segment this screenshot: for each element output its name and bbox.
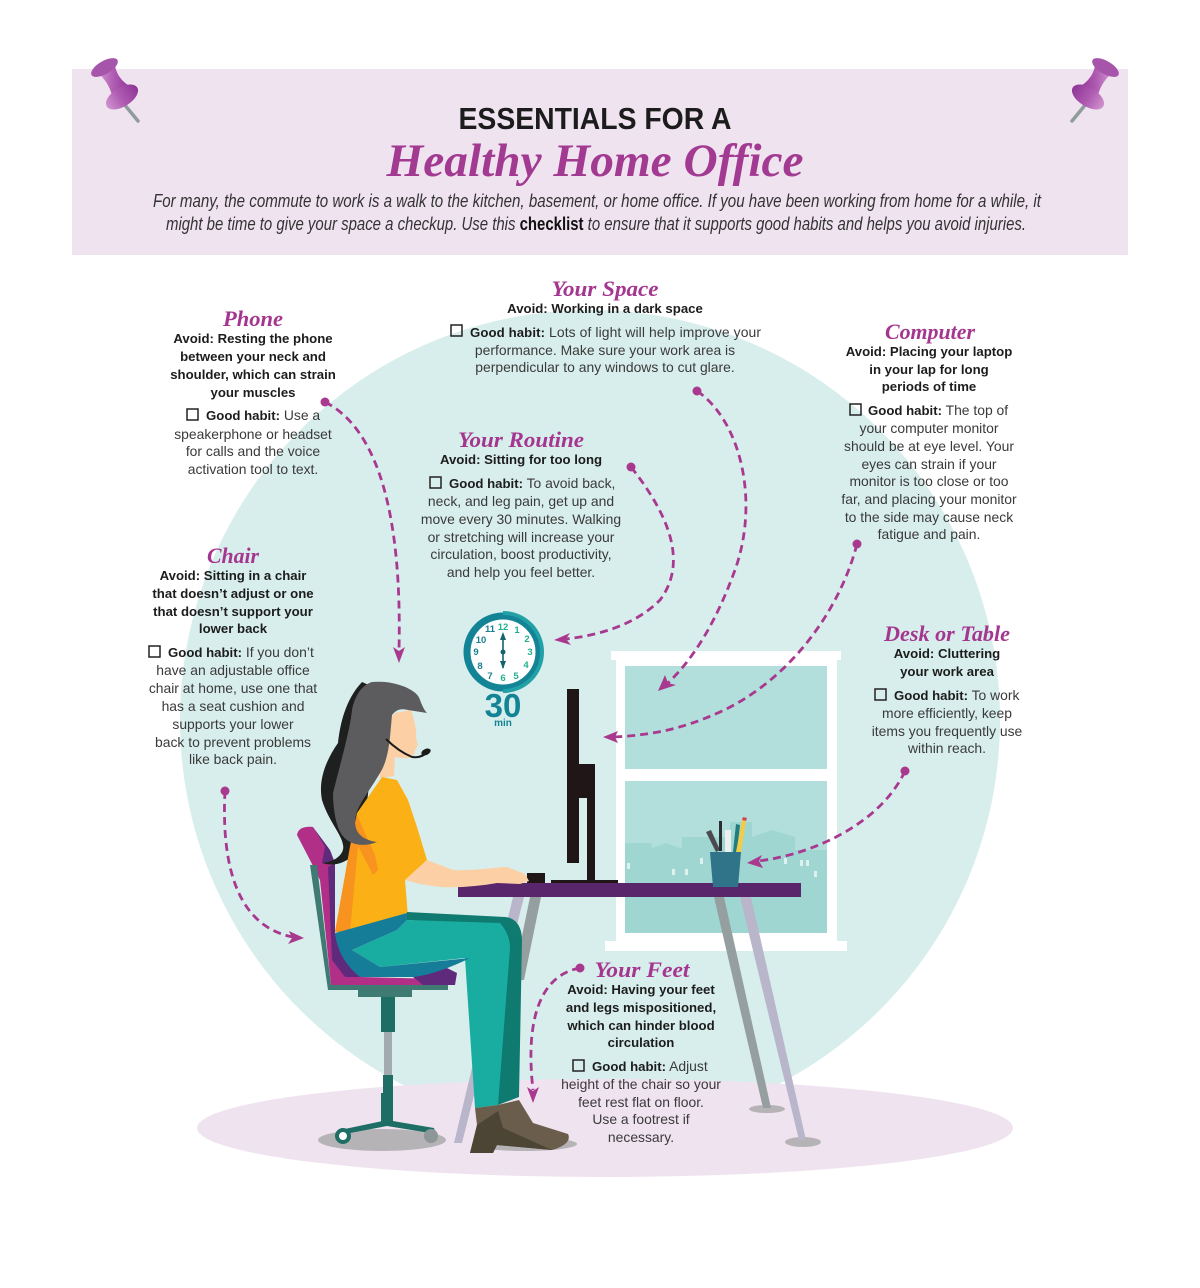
- avoid: your muscles: [210, 385, 296, 400]
- intro text: [153, 191, 1042, 234]
- panel: phone: [170, 306, 336, 477]
- avoid: periods of time: [882, 379, 976, 394]
- avoid: Avoid: Cluttering: [894, 646, 1000, 661]
- clock: 10: [476, 635, 486, 646]
- avoid: Avoid: Sitting in a chair: [160, 568, 306, 583]
- panel: desk or table: [872, 621, 1023, 756]
- avoid: lower back: [199, 621, 268, 636]
- avoid: shoulder, which can strain: [170, 367, 336, 382]
- good habit: or stretching will increase your: [428, 529, 615, 545]
- avoid: that doesn’t adjust or one: [152, 586, 314, 601]
- avoid: Avoid: Placing your laptop: [846, 344, 1012, 359]
- good habit: [451, 324, 761, 375]
- clock: min: [494, 718, 512, 729]
- boot: [470, 1100, 569, 1153]
- clock: 11: [485, 624, 496, 635]
- clock: 8: [477, 661, 483, 672]
- good habit: Good habit: To work: [894, 687, 1020, 703]
- good habit: monitor is too close or too: [849, 473, 1009, 489]
- good habit: within reach.: [907, 740, 986, 756]
- panel: computer: [841, 319, 1017, 542]
- person: [321, 682, 569, 1153]
- chair: [297, 827, 457, 1143]
- good habit: far, and placing your monitor: [841, 491, 1017, 507]
- good habit: [561, 1058, 721, 1145]
- avoid: in your lap for long: [869, 362, 989, 377]
- clock: 1: [514, 625, 520, 636]
- intro text: might be time to give your space a checkup. Use this checklist to ensure that it supports good habits and helps you avoid injuries.: [166, 214, 1026, 234]
- panel: your feet: [561, 957, 721, 1145]
- pants dark side: [407, 912, 522, 1105]
- good habit: speakerphone or headset: [174, 426, 332, 442]
- avoid: Avoid: Working in a dark space: [507, 301, 703, 316]
- good habit: like back pain.: [189, 751, 277, 767]
- good habit: neck, and leg pain, get up and: [428, 493, 614, 509]
- pants light: [352, 920, 510, 1108]
- good habit: supports your lower: [172, 716, 294, 732]
- arm: [405, 860, 529, 887]
- arrow: desk to cup: [747, 766, 910, 868]
- arrow: chair: [220, 786, 304, 944]
- heading: Desk or Table: [883, 621, 1010, 646]
- good habit: to the side may cause neck: [845, 509, 1013, 525]
- clock: 30: [485, 687, 521, 724]
- good habit: back to prevent problems: [155, 734, 311, 750]
- arrow: computer to monitor: [603, 540, 862, 743]
- icon: right push pin: [1068, 54, 1122, 121]
- window: [605, 651, 847, 951]
- good habit: Good habit: Adjust: [592, 1058, 708, 1074]
- avoid: and legs mispositioned,: [566, 1000, 716, 1015]
- arrow: routine to clock: [554, 462, 673, 645]
- good habit: feet rest flat on floor.: [578, 1094, 704, 1110]
- good habit: necessary.: [608, 1129, 674, 1145]
- avoid: Avoid: Having your feet: [567, 982, 715, 997]
- good habit: performance. Make sure your work area is: [475, 342, 735, 358]
- good habit: Good habit: To avoid back,: [449, 475, 615, 491]
- pants seat shadow: [335, 913, 470, 977]
- heading: Your Space: [552, 276, 659, 301]
- clock: 4: [523, 660, 529, 671]
- clock: 7: [487, 671, 493, 682]
- avoid: [170, 331, 336, 400]
- clock: 6: [500, 673, 506, 684]
- floor ellipse: [197, 1079, 1013, 1177]
- clock: [467, 613, 542, 729]
- panel: your space: [451, 276, 761, 375]
- header banner: [72, 54, 1128, 255]
- good habit: your computer monitor: [860, 420, 999, 436]
- avoid: circulation: [608, 1035, 674, 1050]
- good habit: [841, 402, 1017, 542]
- avoid: which can hinder blood: [566, 1018, 715, 1033]
- good habit: Use a footrest if: [592, 1111, 690, 1127]
- clock: 3: [527, 647, 533, 658]
- good habit: more efficiently, keep: [882, 705, 1012, 721]
- good habit: height of the chair so your: [561, 1076, 721, 1092]
- arrow: feet: [527, 964, 584, 1103]
- good habit: circulation, boost productivity,: [430, 546, 612, 562]
- heading: Computer: [885, 319, 975, 344]
- avoid: between your neck and: [180, 349, 326, 364]
- avoid: that doesn’t support your: [153, 604, 313, 619]
- background circle: [180, 310, 1000, 1130]
- good habit: items you frequently use: [872, 723, 1023, 739]
- good habit: move every 30 minutes. Walking: [421, 511, 621, 527]
- panel: your routine: [421, 427, 621, 580]
- headset: [386, 739, 428, 757]
- clock: 2: [524, 634, 530, 645]
- neck and face: [375, 710, 418, 778]
- good habit: should be at eye level. Your: [844, 438, 1014, 454]
- good habit: fatigue and pain.: [878, 526, 980, 542]
- long hair back: [321, 682, 380, 864]
- good habit: Good habit: The top of: [868, 402, 1008, 418]
- avoid: Avoid: Sitting for too long: [440, 452, 602, 467]
- good habit: Good habit: Use a: [206, 407, 320, 423]
- avoid: [846, 344, 1012, 394]
- arrow: your space to window: [658, 386, 746, 691]
- arrow: phone to headset: [320, 398, 405, 663]
- good habit: has a seat cushion and: [162, 698, 304, 714]
- hair front: [333, 682, 427, 845]
- good habit: [149, 644, 317, 767]
- good habit: perpendicular to any windows to cut glare.: [475, 359, 735, 375]
- good habit: [872, 687, 1023, 756]
- good habit: Good habit: If you don’t: [168, 644, 314, 660]
- desk: [454, 883, 806, 1143]
- avoid: [566, 982, 716, 1050]
- good habit: [421, 475, 621, 580]
- monitor: [527, 689, 618, 883]
- clock: 9: [473, 647, 479, 658]
- good habit: activation tool to text.: [188, 461, 318, 477]
- icon: left push pin: [88, 54, 142, 121]
- clock: 5: [513, 671, 519, 682]
- avoid: your work area: [900, 664, 995, 679]
- good habit: Good habit: Lots of light will help improve your: [470, 324, 761, 340]
- panel: chair: [149, 543, 317, 767]
- intro text: For many, the commute to work is a walk to the kitchen, basement, or home office. If you have been working from home for a while, it: [153, 191, 1042, 211]
- good habit: chair at home, use one that: [149, 680, 317, 696]
- pen cup: [706, 817, 747, 887]
- heading: Your Routine: [458, 427, 584, 452]
- heading: Phone: [222, 306, 283, 331]
- good habit: and help you feel better.: [447, 564, 595, 580]
- title line one: ESSENTIALS FOR A: [458, 101, 732, 136]
- title line two: Healthy Home Office: [385, 135, 804, 187]
- heading: Your Feet: [594, 957, 690, 982]
- clock: 12: [498, 622, 508, 633]
- shirt: [335, 777, 427, 932]
- floor shadows: [318, 1105, 821, 1151]
- good habit: for calls and the voice: [186, 443, 320, 459]
- avoid: [152, 568, 314, 636]
- heading: Chair: [207, 543, 259, 568]
- good habit: have an adjustable office: [156, 662, 310, 678]
- good habit: [174, 407, 332, 477]
- avoid: Avoid: Resting the phone: [173, 331, 333, 346]
- good habit: eyes can strain if your: [861, 456, 997, 472]
- avoid: [894, 646, 1000, 679]
